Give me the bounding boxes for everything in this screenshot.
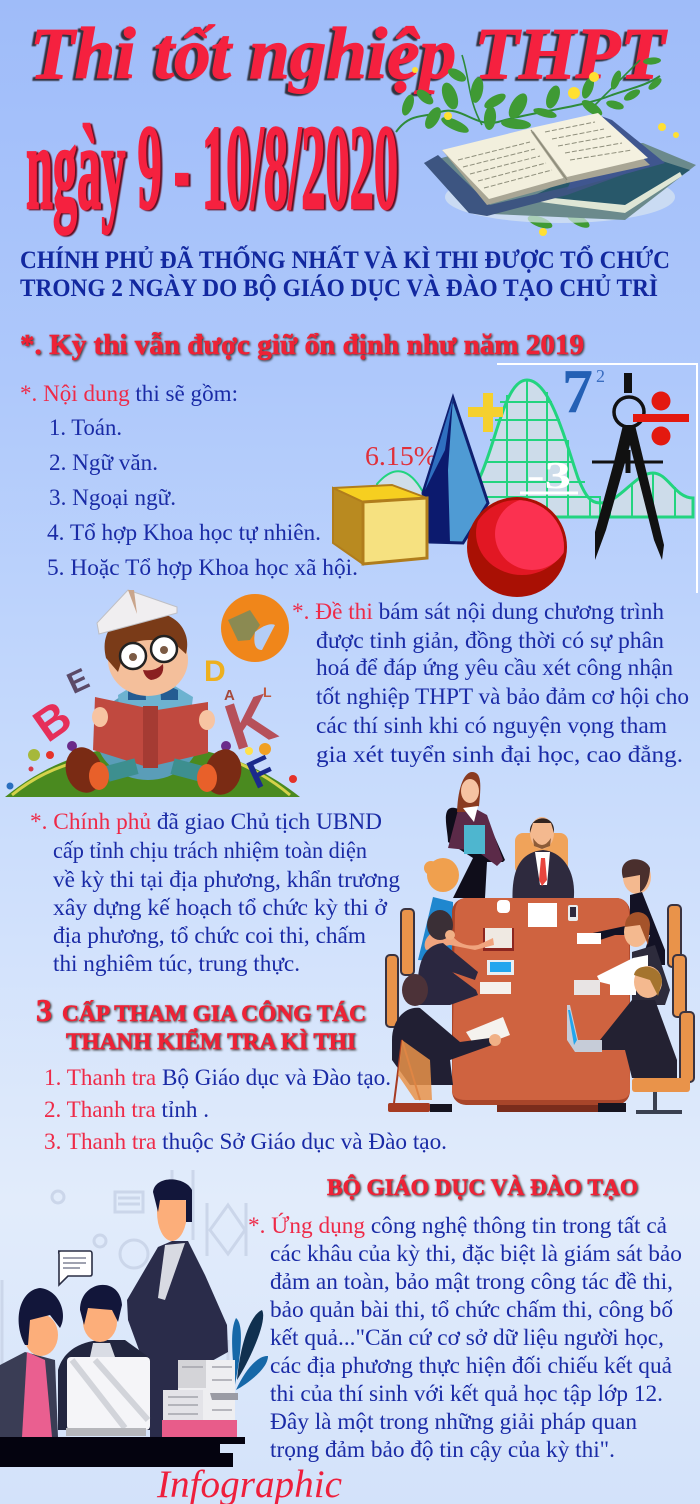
exam paper paragraph: các thí sinh khi có nguyện vọng tham [316, 713, 667, 738]
icon: math shapes: 6.15% [365, 441, 437, 471]
exam paper paragraph: tốt nghiệp THPT và bảo đảm cơ hội cho [316, 684, 689, 709]
section heading: three levels of inspection: THANH KIỂM TRA KÌ THI [66, 1028, 356, 1054]
government paragraph: *. Chính phủ đã giao Chủ tịch UBND [30, 809, 382, 834]
exam subjects list [20, 381, 358, 580]
exam paper paragraph: gia xét tuyển sinh đại học, cao đẳng. [316, 742, 683, 767]
government paragraph: về kỳ thi tại địa phương, khẩn trương [53, 867, 401, 892]
icon: math shapes: 2 [596, 366, 605, 386]
technology paragraph: các khâu của kỳ thi, đặc biệt là giám sát bảo [270, 1241, 682, 1266]
government paragraph: cấp tỉnh chịu trách nhiệm toàn diện [53, 838, 367, 863]
section heading: three levels of inspection: 3 [36, 992, 52, 1028]
exam subjects list: 1. Toán. [49, 415, 122, 440]
illustration: boy reading a book: A [224, 687, 235, 704]
exam subjects list: 3. Ngoại ngữ. [49, 485, 176, 510]
technology paragraph: trọng đảm bảo độ tin cậy của kỳ thi". [270, 1437, 615, 1462]
inspection list: 2. Thanh tra tỉnh . [44, 1097, 209, 1122]
illustration: boy reading a book: B [24, 690, 81, 752]
government paragraph [30, 809, 401, 976]
technology paragraph: thi của thí sinh với kết quả học tập lớp 12. [270, 1381, 663, 1406]
section heading: three levels of inspection [36, 992, 366, 1054]
government paragraph: thi nghiêm túc, trung thực. [53, 951, 300, 976]
inspection list [44, 1065, 447, 1154]
icon: math shapes [333, 358, 697, 597]
exam subjects list: 5. Hoặc Tổ hợp Khoa học xã hội. [47, 555, 358, 580]
technology paragraph: *. Ứng dụng công nghệ thông tin trong tất cả [248, 1212, 667, 1238]
icon: math shapes: 7 [562, 358, 593, 426]
subheading: CHÍNH PHỦ ĐÃ THỐNG NHẤT VÀ KÌ THI ĐƯỢC TỔ CHỨC [20, 245, 670, 274]
icon: math shapes: -3 [527, 455, 571, 497]
technology paragraph: các địa phương thực hiện đối chiếu kết quả [270, 1353, 672, 1378]
illustration: boy reading a book: K [216, 679, 285, 764]
illustration: team at a desk [0, 1170, 268, 1467]
illustration: boy reading a book: L [263, 684, 272, 700]
section heading: ministry: BỘ GIÁO DỤC VÀ ĐÀO TẠO [327, 1175, 638, 1200]
illustration: boy reading a book: F [241, 747, 282, 798]
illustration: boy reading a book: D [204, 655, 226, 688]
illustration: boy reading a book: E [62, 662, 94, 701]
icon: open books with leaves [396, 55, 696, 236]
technology paragraph: đảm an toàn, bảo mật trong công tác đề thi, [270, 1269, 673, 1294]
exam paper paragraph [292, 599, 689, 767]
exam paper paragraph: được tinh giản, đồng thời có sự phân [316, 628, 665, 653]
inspection list: 3. Thanh tra thuộc Sở Giáo dục và Đào tạo. [44, 1129, 447, 1154]
exam paper paragraph: *. Đề thi bám sát nội dung chương trình [292, 599, 664, 624]
title: Thi tốt nghiệp THPT [30, 13, 667, 94]
technology paragraph: Đây là một trong những giải pháp quan [270, 1409, 638, 1434]
technology paragraph: bảo quản bài thi, tổ chức chấm thi, công bố [270, 1297, 673, 1322]
exam subjects list: 2. Ngữ văn. [49, 450, 158, 475]
subheading: TRONG 2 NGÀY DO BỘ GIÁO DỤC VÀ ĐÀO TẠO CHỦ TRÌ [20, 274, 658, 302]
illustration: meeting around a table [386, 772, 694, 1112]
technology paragraph: kết quả..."Căn cứ cơ sở dữ liệu người học, [270, 1325, 664, 1350]
government paragraph: xây dựng kế hoạch tổ chức kỳ thi ở [53, 895, 388, 920]
government paragraph: địa phương, tổ chức coi thi, chấm [53, 923, 366, 948]
illustration: boy reading a book [5, 590, 300, 799]
exam paper paragraph: hoá để đáp ứng yêu cầu xét công nhận [316, 655, 674, 680]
subheading [20, 245, 670, 302]
section heading: three levels of inspection: CẤP THAM GIA CÔNG TÁC [62, 1000, 366, 1026]
inspection list: 1. Thanh tra Bộ Giáo dục và Đào tạo. [44, 1065, 391, 1090]
exam subjects list: 4. Tổ hợp Khoa học tự nhiên. [47, 520, 321, 545]
section heading: stable exam: *. Kỳ thi vẫn được giữ ổn định như năm 2019 [20, 329, 584, 361]
exam subjects list: *. Nội dung thi sẽ gồm: [20, 381, 238, 406]
technology paragraph [248, 1212, 682, 1462]
